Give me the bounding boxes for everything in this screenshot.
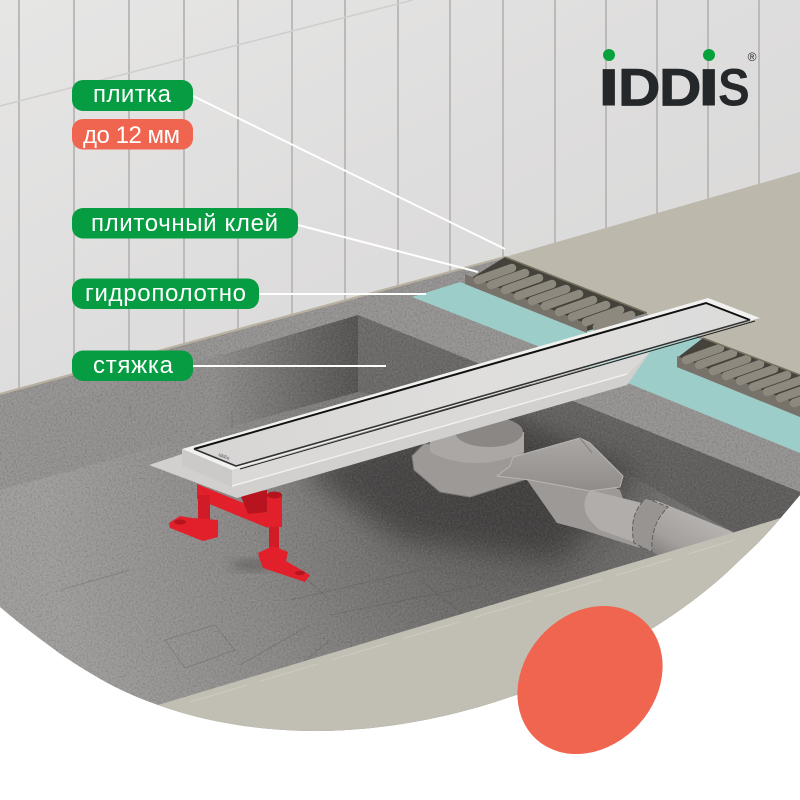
drain body and outlet pipe (412, 420, 733, 555)
label: tile adhesive: плиточный клей (91, 210, 278, 237)
label: screed: стяжка (93, 352, 174, 379)
screed concrete (0, 256, 800, 731)
side face (232, 352, 650, 487)
leader line: tile adhesive (298, 225, 478, 272)
logo: IDDIS: ® (748, 50, 757, 64)
logo: IDDIS: I (597, 58, 621, 117)
label: screed (72, 350, 193, 381)
base plate (412, 440, 530, 497)
slots (194, 303, 750, 449)
label: tile: плитка (93, 81, 172, 108)
brand mark on grate: iddis (217, 452, 231, 462)
end face (182, 449, 232, 470)
trench side wall (358, 315, 800, 547)
floor tile (505, 172, 800, 375)
cross arm (197, 484, 268, 528)
tile adhesive ribs: right (677, 338, 800, 417)
bowl (430, 432, 524, 463)
funnel (527, 480, 640, 548)
foreground floor tile (158, 518, 780, 731)
upper screed strip (0, 257, 800, 492)
coral ellipse (487, 576, 693, 784)
logo: IDDIS: D (659, 57, 701, 117)
stainless channel (149, 298, 760, 498)
logo: IDDIS: S (718, 57, 750, 117)
leader line: tile (193, 96, 505, 249)
flange (149, 352, 650, 498)
grate plate (182, 298, 760, 470)
logo: IDDIS: I (697, 58, 721, 117)
label: up to 12 mm: до 12 мм (83, 122, 180, 149)
wall tiles (0, 0, 800, 400)
label: waterproofing: гидрополотно (85, 280, 246, 307)
leader line: membrane (259, 293, 426, 295)
left foot (169, 516, 218, 541)
surface marks (60, 405, 480, 690)
label: tile (72, 80, 193, 111)
logo: IDDIS (597, 49, 757, 117)
leg shadow (230, 561, 274, 569)
red adjustable support legs (169, 484, 310, 582)
logo: IDDIS: D (618, 57, 660, 117)
waterproofing membrane (412, 282, 800, 453)
right tube (267, 495, 282, 527)
trench floor (0, 314, 800, 731)
outlet pipe (652, 500, 733, 555)
trap housing (497, 438, 623, 491)
coupling ring (632, 498, 668, 552)
left screw (198, 495, 210, 520)
tile adhesive ribs: left (465, 257, 647, 333)
leader line: screed (193, 365, 386, 367)
right screw (269, 527, 279, 549)
right foot (258, 546, 310, 582)
trench back wall (0, 315, 358, 490)
shadow under channel (300, 400, 640, 560)
